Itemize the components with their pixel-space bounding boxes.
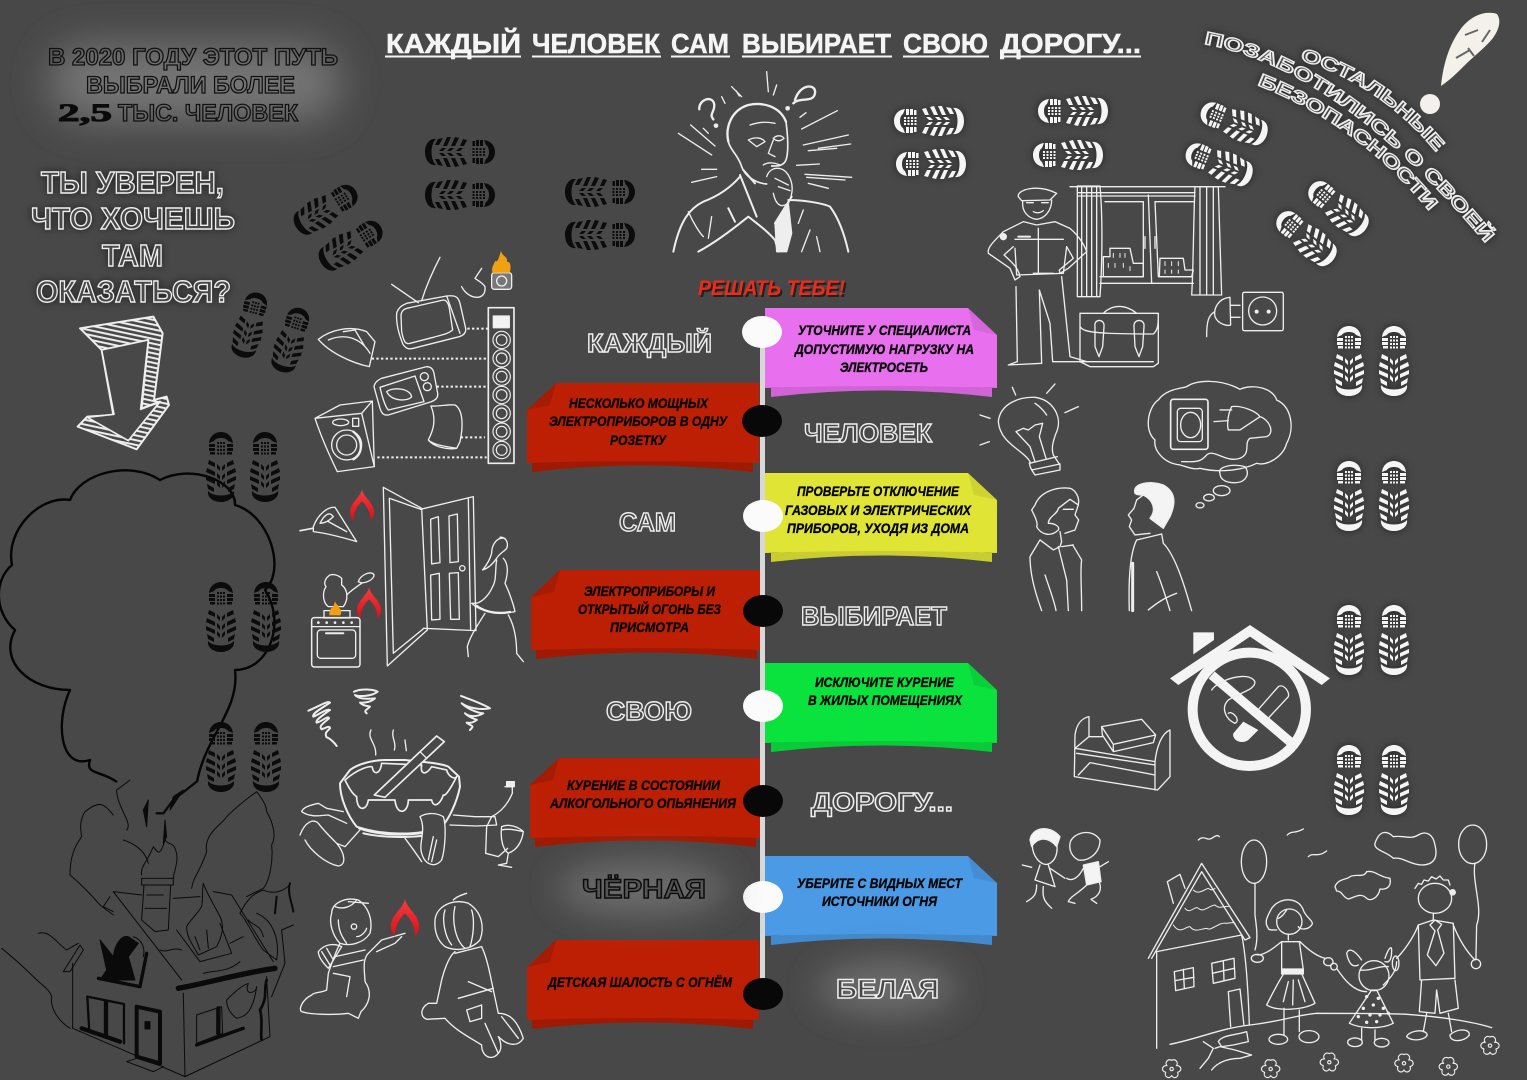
question text: ТЫ УВЕРЕН, bbox=[41, 165, 224, 200]
red ribbon 1: РОЗЕТКУ bbox=[610, 432, 667, 448]
icon: thinking man bbox=[673, 72, 852, 252]
red ribbon 4 bbox=[527, 940, 759, 1029]
path words: САМ bbox=[619, 507, 676, 537]
icon: child with match bbox=[300, 899, 405, 1018]
icon: unattended iron, door, woman and stove bbox=[300, 487, 523, 667]
pink ribbon: УТОЧНИТЕ У СПЕЦИАЛИСТА bbox=[798, 322, 971, 338]
blue ribbon: УБЕРИТЕ С ВИДНЫХ МЕСТ bbox=[797, 875, 963, 891]
red ribbon 2: ПРИСМОТРА bbox=[610, 619, 689, 635]
title: ДОРОГУ... bbox=[1000, 28, 1141, 59]
path words bbox=[582, 328, 953, 1004]
black footprints bbox=[206, 137, 635, 792]
glow behind statistic bbox=[50, 45, 340, 120]
statistic text block bbox=[48, 44, 338, 127]
icon: sitting child bbox=[422, 893, 523, 1057]
icon: no smoking house bbox=[1170, 625, 1330, 766]
question text bbox=[31, 165, 235, 309]
red ribbon 4: ДЕТСКАЯ ШАЛОСТЬ С ОГНЁМ bbox=[547, 974, 732, 990]
title: КАЖДЫЙ bbox=[386, 27, 521, 59]
icon: family drawing bbox=[1148, 825, 1499, 1078]
path words: БЕЛАЯ bbox=[836, 974, 939, 1004]
path words: КАЖДЫЙ bbox=[587, 328, 712, 358]
icon: shelf with matchbox bbox=[1074, 717, 1170, 790]
white footprints bbox=[894, 96, 1409, 815]
question text: ТАМ bbox=[102, 238, 163, 273]
timeline line bbox=[760, 330, 765, 1000]
curved text: the rest took care of safety: ОСТАЛЬНЫЕ bbox=[1300, 48, 1446, 152]
red ribbon 1 bbox=[527, 383, 759, 472]
path words: ЧЕЛОВЕК bbox=[804, 418, 932, 448]
title bbox=[385, 27, 1141, 59]
red ribbon 1: НЕСКОЛЬКО МОЩНЫХ bbox=[569, 395, 709, 411]
red ribbon 3: АЛКОГОЛЬНОГО ОПЬЯНЕНИЯ bbox=[549, 795, 737, 811]
pink ribbon: ЭЛЕКТРОСЕТЬ bbox=[840, 359, 928, 375]
yellow ribbon: ПРИБОРОВ, УХОДЯ ИЗ ДОМА bbox=[787, 520, 969, 536]
yellow ribbon: ПРОВЕРЬТЕ ОТКЛЮЧЕНИЕ bbox=[797, 483, 960, 499]
question text: ЧТО ХОЧЕШЬ bbox=[31, 201, 235, 236]
pink ribbon bbox=[765, 308, 997, 397]
burning house bbox=[2, 780, 293, 1077]
icon: small flaming socket bbox=[492, 251, 511, 273]
icon: ashtray with drunken sleeper bbox=[300, 690, 523, 867]
timeline nodes bbox=[742, 316, 783, 1010]
red ribbon 2: ОТКРЫТЫЙ ОГОНЬ БЕЗ bbox=[578, 600, 721, 617]
statistic text block: ВЫБРАЛИ БОЛЕЕ bbox=[86, 72, 295, 99]
title: САМ bbox=[671, 28, 729, 59]
path words: ВЫБИРАЕТ bbox=[801, 601, 947, 631]
red ribbon 2: ЭЛЕКТРОПРИБОРЫ И bbox=[584, 583, 716, 599]
icon: red flames at iron and stove bbox=[329, 489, 381, 619]
path words: СВОЮ bbox=[606, 696, 692, 726]
icon: light bulb bbox=[980, 384, 1078, 475]
title: ВЫБИРАЕТ bbox=[742, 28, 891, 59]
curved text: the rest took care of safety: ПОЗАБОТИЛИСЬ О СВОЕЙ bbox=[1203, 30, 1498, 244]
pink ribbon: ДОПУСТИМУЮ НАГРУЗКУ НА bbox=[794, 341, 974, 357]
yellow ribbon: ГАЗОВЫХ И ЭЛЕКТРИЧЕСКИХ bbox=[785, 502, 972, 518]
statistic text block: 2,5 bbox=[58, 100, 112, 127]
red ribbon 3 bbox=[530, 758, 762, 847]
red ribbon 2 bbox=[531, 570, 763, 659]
green ribbon: В ЖИЛЫХ ПОМЕЩЕНИЯХ bbox=[808, 692, 963, 708]
smoke cloud bbox=[0, 470, 274, 782]
decision text: РЕШАТЬ ТЕБЕ! bbox=[700, 279, 847, 302]
icon: overloaded power strip with appliances bbox=[315, 257, 514, 472]
question text: ОКАЗАТЬСЯ? bbox=[36, 274, 231, 309]
icon: exclamation mark bbox=[1420, 13, 1499, 114]
title: СВОЮ bbox=[903, 28, 988, 59]
icon: briefcase bbox=[1080, 306, 1158, 367]
icon: couple bbox=[1030, 483, 1192, 611]
red ribbon 3: КУРЕНИЕ В СОСТОЯНИИ bbox=[567, 777, 721, 793]
red ribbon 1: ЭЛЕКТРОПРИБОРОВ В ОДНУ bbox=[549, 413, 728, 429]
icon: policeman bbox=[988, 188, 1087, 365]
decision text: РЕШАТЬ ТЕБЕ! bbox=[698, 277, 845, 300]
title: ЧЕЛОВЕК bbox=[532, 28, 661, 59]
icon: two small children bbox=[1022, 829, 1108, 908]
icon: hatched down arrow bbox=[78, 317, 169, 449]
icon: window with curtains bbox=[1070, 186, 1225, 297]
icon: plug and socket bbox=[1207, 292, 1283, 337]
curved text: the rest took care of safety: БЕЗОПАСНОСТИ bbox=[1256, 72, 1440, 211]
path words: ДОРОГУ... bbox=[811, 787, 953, 817]
green ribbon bbox=[765, 663, 997, 752]
icon: thought bubble with plug bbox=[1148, 381, 1291, 508]
statistic text block: ТЫС. ЧЕЛОВЕК bbox=[118, 100, 298, 127]
blue ribbon bbox=[765, 856, 997, 945]
glow behind choice words bbox=[558, 860, 957, 1016]
statistic text block: В 2020 ГОДУ ЭТОТ ПУТЬ bbox=[48, 44, 338, 71]
blue ribbon: ИСТОЧНИКИ ОГНЯ bbox=[822, 893, 938, 909]
yellow ribbon bbox=[765, 473, 997, 562]
icon: match flame bbox=[391, 899, 419, 937]
green ribbon: ИСКЛЮЧИТЕ КУРЕНИЕ bbox=[815, 674, 955, 690]
path words: ЧЁРНАЯ bbox=[582, 874, 706, 904]
